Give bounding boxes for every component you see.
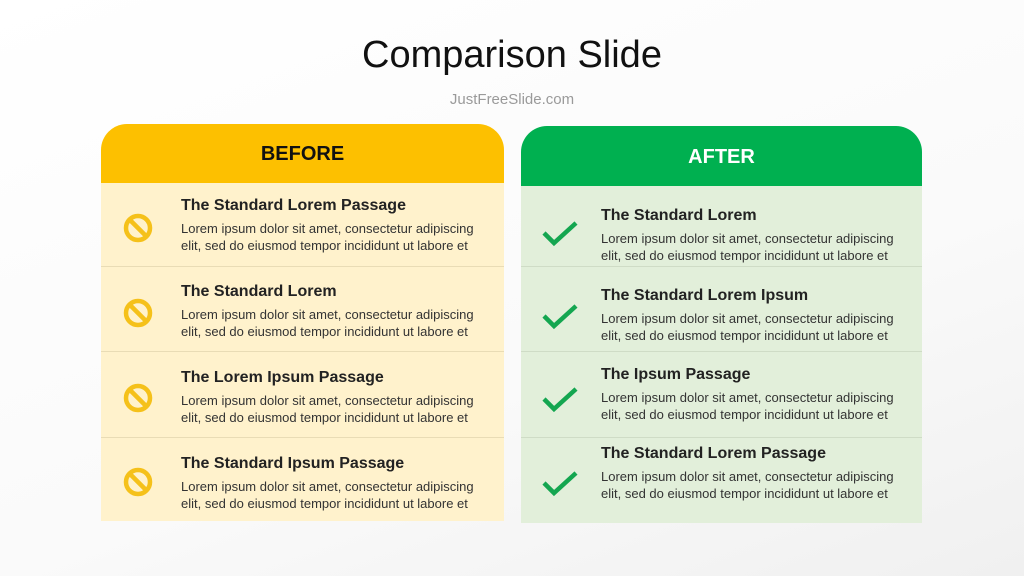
subtitle: JustFreeSlide.com — [450, 91, 574, 108]
header: before: BEFORE — [261, 143, 344, 165]
row 3: Lorem ipsum dolor sit amet, consectetur adipiscing — [601, 390, 894, 405]
icon: check — [542, 387, 578, 412]
icon: prohibited — [124, 214, 152, 242]
row 4: The Standard Lorem Passage — [601, 445, 826, 462]
icon: prohibited — [124, 298, 152, 328]
row 1: elit, sed do eiusmod tempor incididunt ut labore et — [181, 238, 468, 253]
row 1: The Standard Lorem Passage — [181, 197, 406, 214]
header: after: AFTER — [688, 146, 755, 168]
row 4 — [101, 438, 504, 521]
row 2 — [101, 267, 504, 352]
row 3 — [101, 352, 504, 438]
panel: before — [101, 124, 504, 521]
icon: check — [542, 304, 578, 330]
row 2: Lorem ipsum dolor sit amet, consectetur adipiscing — [601, 311, 894, 326]
row 1: Lorem ipsum dolor sit amet, consectetur adipiscing — [181, 221, 474, 236]
row 1: Lorem ipsum dolor sit amet, consectetur adipiscing — [601, 231, 894, 246]
row 4: Lorem ipsum dolor sit amet, consectetur adipiscing — [601, 469, 894, 484]
row 1 — [521, 186, 922, 267]
icon: prohibited — [124, 384, 152, 412]
icon: check — [542, 221, 578, 246]
row 3: The Ipsum Passage — [601, 366, 750, 383]
row 4: elit, sed do eiusmod tempor incididunt ut labore et — [601, 486, 888, 501]
row 2: The Standard Lorem Ipsum — [601, 287, 808, 304]
row 3 — [521, 352, 922, 438]
row 2: elit, sed do eiusmod tempor incididunt ut labore et — [601, 328, 888, 343]
header: before — [101, 124, 504, 183]
row 3: elit, sed do eiusmod tempor incididunt ut labore et — [601, 407, 888, 422]
row 2: Lorem ipsum dolor sit amet, consectetur adipiscing — [181, 307, 474, 322]
row 3: elit, sed do eiusmod tempor incididunt ut labore et — [181, 410, 468, 425]
row 2: The Standard Lorem — [181, 283, 337, 300]
icon: check — [542, 471, 578, 496]
panel: after — [521, 126, 922, 523]
row 1 — [101, 183, 504, 267]
row 2: elit, sed do eiusmod tempor incididunt ut labore et — [181, 324, 468, 339]
row 1: elit, sed do eiusmod tempor incididunt ut labore et — [601, 248, 888, 263]
title: Comparison Slide — [362, 34, 662, 76]
header: after — [521, 126, 922, 186]
row 1: The Standard Lorem — [601, 207, 757, 224]
row 4: elit, sed do eiusmod tempor incididunt ut labore et — [181, 496, 468, 511]
row 4: The Standard Ipsum Passage — [181, 455, 404, 472]
row 4 — [521, 438, 922, 523]
row 3: The Lorem Ipsum Passage — [181, 369, 384, 386]
row 2 — [521, 267, 922, 352]
row 3: Lorem ipsum dolor sit amet, consectetur adipiscing — [181, 393, 474, 408]
icon: prohibited — [124, 468, 152, 496]
row 4: Lorem ipsum dolor sit amet, consectetur adipiscing — [181, 479, 474, 494]
